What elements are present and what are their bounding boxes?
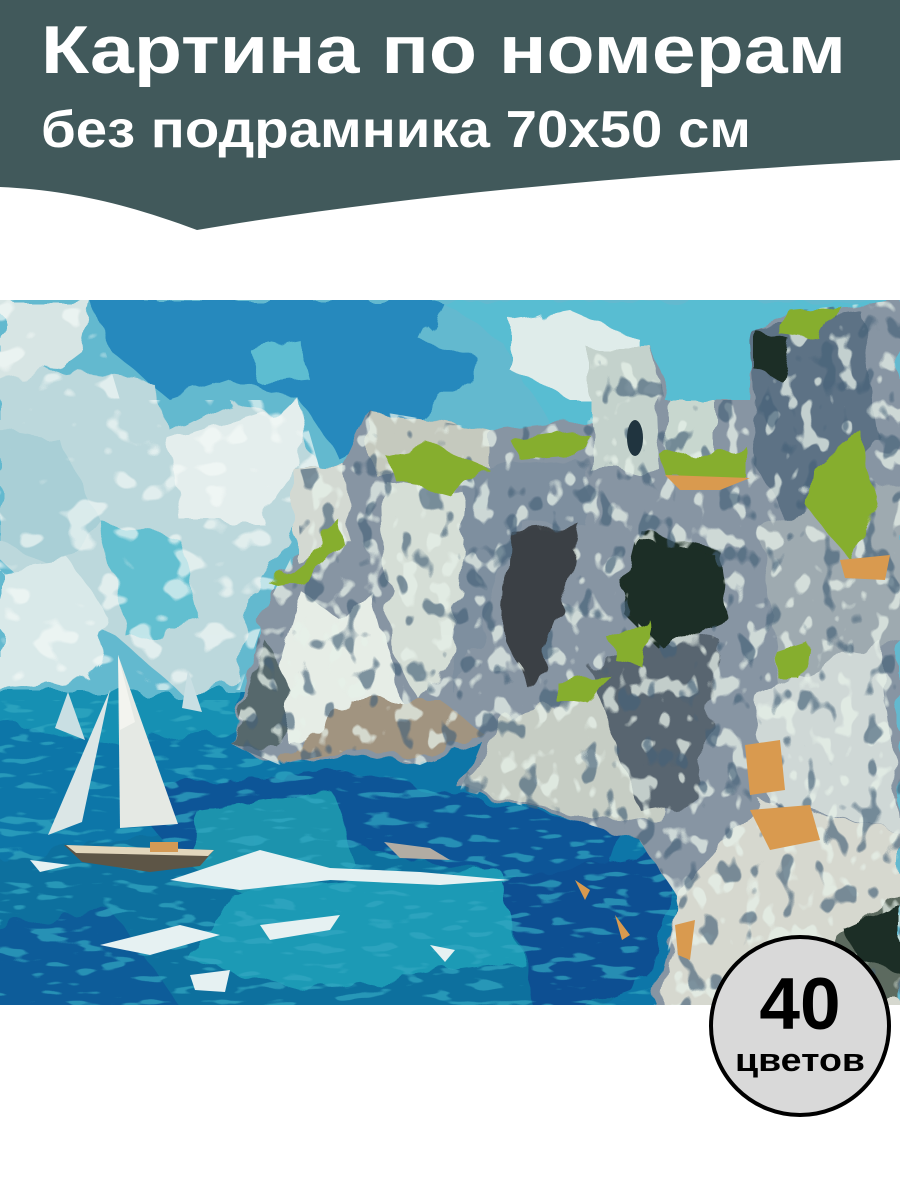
- cliffs: [232, 300, 900, 1020]
- color count badge: [711, 937, 889, 1115]
- sailboat: [48, 655, 214, 872]
- sky: [0, 300, 900, 700]
- title: Картина по номерам: [41, 12, 846, 88]
- small boat: [384, 842, 450, 860]
- tower window: [627, 420, 643, 456]
- badge number: 40: [759, 964, 841, 1045]
- cliff brush texture: [230, 300, 900, 1005]
- orange accents: [575, 475, 890, 960]
- subtitle: без подрамника 70х50 см: [41, 101, 751, 159]
- sea ripple texture: [0, 700, 700, 1005]
- dark foliage and arch: [505, 330, 900, 970]
- painting: coastal castle and sailboat: [0, 300, 900, 1022]
- green foliage: [270, 305, 880, 705]
- badge label: цветов: [735, 1042, 865, 1078]
- distant sails: [55, 670, 202, 740]
- sea: [0, 692, 700, 1022]
- header banner: [0, 0, 900, 230]
- waves: [30, 850, 510, 992]
- cloud brush texture: [0, 300, 340, 700]
